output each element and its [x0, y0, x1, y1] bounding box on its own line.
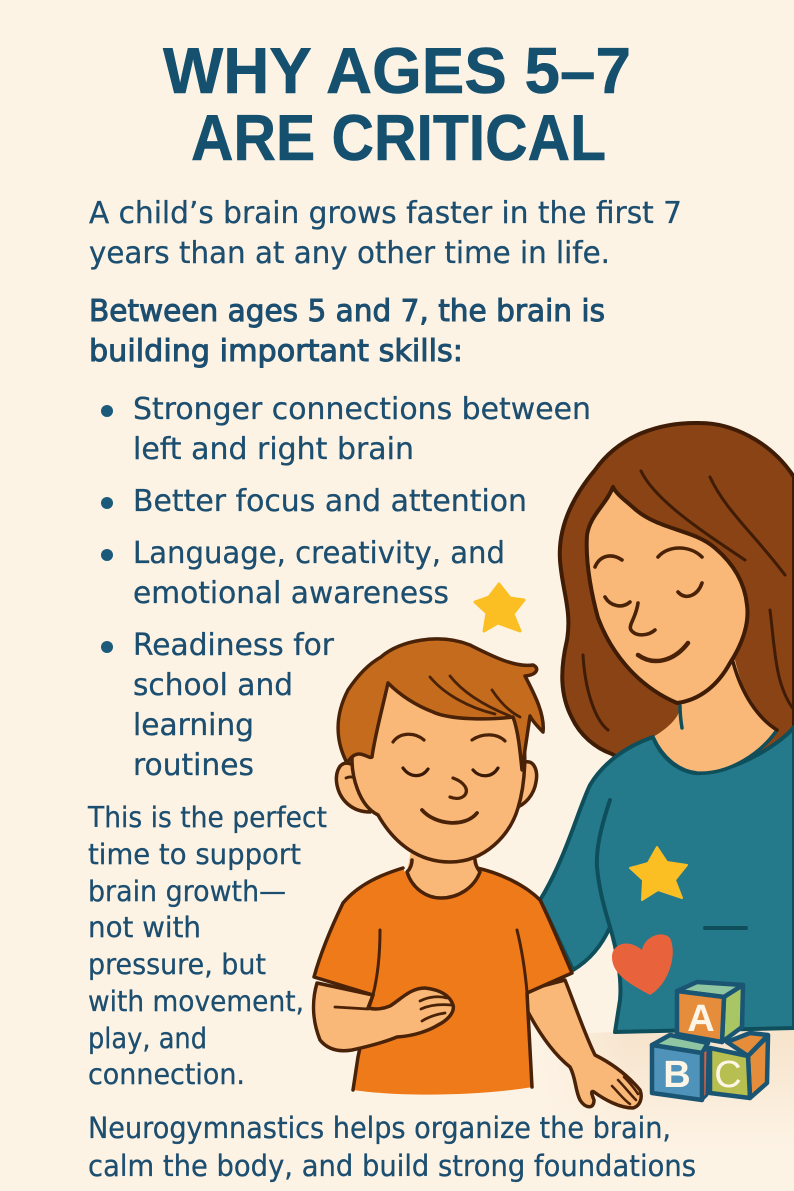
- star above boy: [475, 584, 524, 631]
- bold subheading: building important skills:: [89, 334, 463, 369]
- mother torso and arm: [540, 727, 794, 1032]
- bullet list: routines: [133, 748, 254, 783]
- intro text: A child’s brain grows faster in the first 7: [89, 196, 682, 231]
- heart: [612, 934, 673, 995]
- bullet list: Better focus and attention: [133, 484, 527, 519]
- block B: B: [663, 1054, 691, 1096]
- bullet list: learning: [133, 708, 254, 743]
- mother face: [587, 487, 747, 703]
- illustration: boy: [314, 639, 641, 1108]
- boy ear detail: [346, 777, 366, 792]
- support paragraph: connection.: [88, 1058, 245, 1091]
- bullet list: Readiness for: [133, 628, 335, 663]
- mother neck right edge: [733, 662, 777, 730]
- illustration: alphabet blocks: [652, 982, 768, 1100]
- boy hand fingers: [612, 1077, 638, 1104]
- boy sleeve lines: [373, 930, 527, 995]
- bullet list: school and: [133, 668, 293, 703]
- shirt dash: [705, 926, 746, 930]
- boy ears: [336, 762, 537, 812]
- table surface: [539, 1026, 794, 1152]
- support paragraph: time to support: [88, 838, 301, 871]
- support paragraph: [87, 801, 327, 1091]
- boy t-shirt: [314, 868, 572, 1095]
- bullet list: Language, creativity, and: [133, 536, 505, 571]
- support paragraph: play, and: [88, 1022, 207, 1055]
- closing text: Neurogymnastics helps organize the brain,: [88, 1111, 671, 1145]
- boy left arm: [314, 983, 453, 1051]
- support paragraph: with movement,: [88, 985, 304, 1018]
- mother neck line: [653, 706, 777, 773]
- boy facial features: [393, 734, 505, 823]
- mother neck: [653, 660, 777, 773]
- mother arm line: [597, 800, 610, 927]
- boy t-shirt outline: [314, 868, 572, 1090]
- intro text: [89, 196, 682, 271]
- bullet list: [101, 392, 591, 783]
- boy collar: [407, 860, 480, 898]
- illustration: mother: [540, 423, 794, 1032]
- boy head: [352, 672, 525, 862]
- boy hair: [338, 639, 543, 770]
- mother facial features: [595, 548, 702, 661]
- support paragraph: not with: [88, 911, 201, 944]
- boy hair strands: [430, 676, 520, 717]
- mother hair strands: [583, 471, 794, 730]
- support paragraph: This is the perfect: [87, 801, 327, 834]
- support paragraph: brain growth—: [88, 875, 286, 908]
- boy neck: [407, 850, 480, 898]
- bullet list: Stronger connections between: [133, 392, 591, 427]
- closing text: [88, 1111, 696, 1183]
- intro text: years than at any other time in life.: [89, 236, 610, 271]
- support paragraph: pressure, but: [88, 948, 266, 981]
- bold subheading: [89, 294, 605, 369]
- boy right arm: [527, 980, 641, 1108]
- bullet list: left and right brain: [133, 432, 414, 467]
- star on mother's shirt: [630, 847, 687, 900]
- mother hair: [560, 423, 794, 770]
- title: [163, 34, 631, 174]
- bullet list: emotional awareness: [133, 576, 449, 611]
- boy left arm details: [335, 997, 451, 1021]
- block C: C: [714, 1054, 742, 1096]
- title: WHY AGES 5–7: [163, 34, 631, 107]
- title: ARE CRITICAL: [191, 101, 606, 174]
- closing text: calm the body, and build strong foundations: [88, 1149, 696, 1183]
- bold subheading: Between ages 5 and 7, the brain is: [89, 294, 605, 329]
- block A: A: [687, 998, 715, 1040]
